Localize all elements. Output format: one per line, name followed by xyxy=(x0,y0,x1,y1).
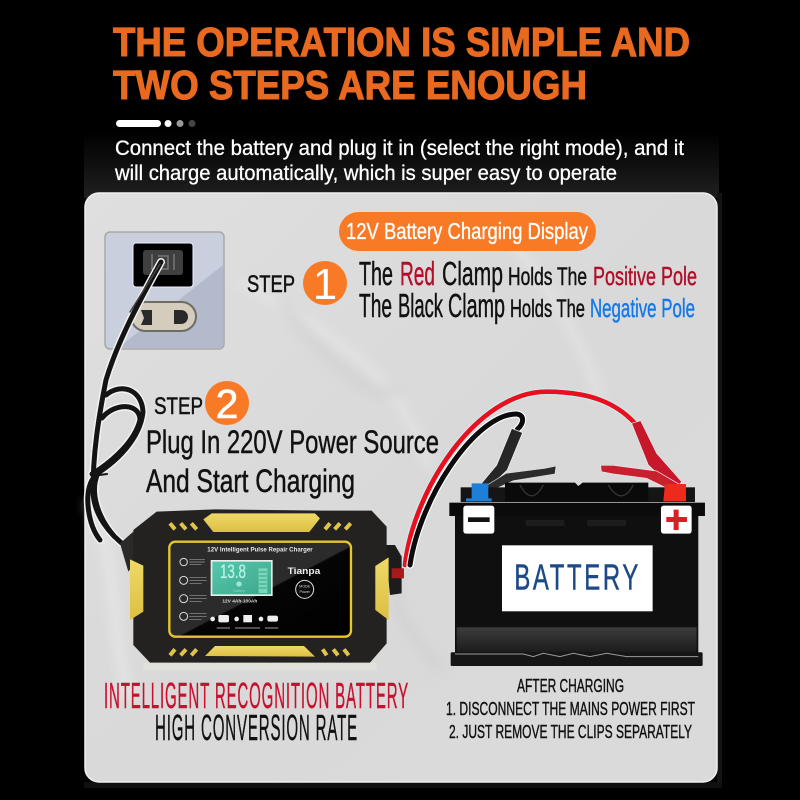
brand: Tianpa xyxy=(288,566,321,576)
step 1 instructions: The xyxy=(359,255,393,292)
step 1 badge: STEP xyxy=(247,271,295,298)
step 1 instructions: Red xyxy=(400,255,435,292)
step 2 badge: STEP xyxy=(154,393,203,420)
pagination dots xyxy=(116,120,196,127)
LCD display: 13.8 xyxy=(220,562,246,583)
control panel: 12V 4Ah-100Ah xyxy=(222,599,257,605)
step 1 instructions: Positive Pole xyxy=(593,261,697,291)
intro text: will charge automatically, which is super easy to operate xyxy=(114,162,617,185)
battery xyxy=(449,483,705,666)
callout: 12V battery charging display xyxy=(339,212,596,251)
callout: 12V battery charging display: 12V Battery Charging Display xyxy=(346,218,588,244)
power cord xyxy=(88,262,161,548)
battery label: BATTERY xyxy=(514,557,641,598)
step 1 instructions: Clamp xyxy=(448,287,505,324)
slogan xyxy=(104,675,409,748)
step 1 instructions: Clamp xyxy=(442,255,503,292)
icon: wall socket xyxy=(105,232,224,349)
title xyxy=(113,19,690,108)
step 2 badge: 2 xyxy=(216,381,238,427)
intro text: Connect the battery and plug it in (select the right mode), and it xyxy=(115,137,684,160)
panel: instructions background xyxy=(85,193,717,782)
step 1 instructions: Holds The xyxy=(510,295,585,323)
step 1 badge xyxy=(247,260,347,309)
battery top cover xyxy=(461,483,695,502)
battery label xyxy=(502,545,653,611)
device name: 12V Intelligent Pulse Repair Charger xyxy=(207,548,313,554)
step 1 instructions: Black xyxy=(398,287,443,324)
red clamp xyxy=(601,421,682,490)
mode button: MODE xyxy=(299,585,311,589)
icon: positive terminal label xyxy=(661,506,692,534)
after charging notes xyxy=(446,676,695,742)
slogan: HIGH CONVERSION RATE xyxy=(155,707,358,748)
step 2 badge xyxy=(154,381,249,427)
step 1 instructions: The xyxy=(359,287,392,324)
step 1 instructions: Negative Pole xyxy=(590,293,695,323)
icon: negative terminal label xyxy=(463,506,494,534)
title: THE OPERATION IS SIMPLE AND xyxy=(113,19,690,65)
mode button: Power xyxy=(299,590,311,594)
charger reflection xyxy=(143,663,377,670)
yellow bumpers xyxy=(130,513,389,657)
mode indicators xyxy=(210,615,278,628)
after charging notes: AFTER CHARGING xyxy=(517,676,624,696)
charger body xyxy=(133,509,387,663)
step 2 instructions xyxy=(146,424,439,499)
intro text xyxy=(114,137,684,185)
step 1 instructions xyxy=(359,255,697,324)
red and black battery cables with clamps xyxy=(405,392,682,565)
title: TWO STEPS ARE ENOUGH xyxy=(113,62,587,108)
control panel xyxy=(169,542,351,637)
step 1 badge: 1 xyxy=(313,260,337,309)
LCD display xyxy=(211,560,273,596)
black clamp xyxy=(477,428,556,493)
battery body xyxy=(449,503,705,666)
charger device xyxy=(120,509,404,670)
cable connectors xyxy=(120,532,404,595)
step 1 instructions: Holds The xyxy=(508,263,587,291)
mode button xyxy=(296,580,314,598)
vent slots xyxy=(170,523,351,655)
left feature icons xyxy=(180,558,207,620)
LCD display: Battery xyxy=(233,589,245,593)
step 2 instructions: Plug In 220V Power Source xyxy=(146,424,439,460)
step 2 instructions: And Start Charging xyxy=(146,463,355,499)
